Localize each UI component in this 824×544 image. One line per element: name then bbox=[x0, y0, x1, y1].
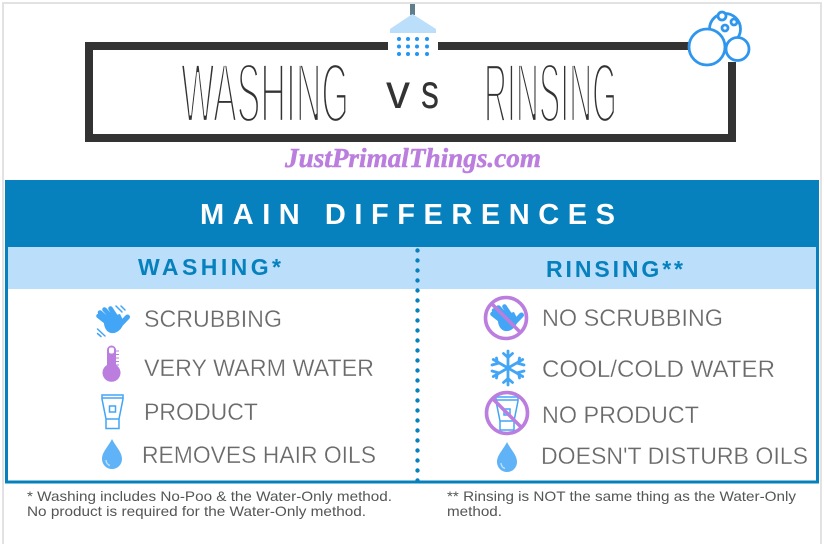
text: product: PRODUCT bbox=[144, 399, 258, 426]
footnote: rinsing: method. bbox=[447, 503, 502, 519]
text: WASHING bbox=[181, 46, 349, 140]
icon: product tube bbox=[102, 395, 123, 428]
footnote: rinsing bbox=[447, 488, 796, 519]
text: removes hair oils: REMOVES HAIR OILS bbox=[142, 442, 376, 469]
footnote: washing bbox=[27, 488, 392, 519]
icon: no product bbox=[486, 392, 528, 434]
icon: soap bubbles bbox=[689, 12, 749, 65]
title: vs: v bbox=[386, 66, 410, 119]
icon: no scrubbing bbox=[486, 298, 526, 338]
title: vs: s bbox=[421, 66, 439, 119]
panel: main differences bbox=[5, 180, 819, 482]
text: RINSING bbox=[484, 46, 617, 140]
icon: water drop right bbox=[497, 442, 517, 472]
text: very warm water: VERY WARM WATER bbox=[144, 355, 374, 382]
title: vs bbox=[386, 66, 439, 119]
column heading: washing: WASHING* bbox=[138, 254, 281, 280]
text: no product: NO PRODUCT bbox=[542, 402, 699, 429]
text: cool/cold water: COOL/COLD WATER bbox=[542, 356, 775, 383]
website name: JustPrimalThings.com bbox=[284, 143, 541, 173]
footnote: washing: * Washing includes No-Poo & the Water-Only method. bbox=[27, 488, 392, 504]
icon: water drop bbox=[102, 439, 122, 469]
text: doesn't disturb oils: DOESN'T DISTURB OILS bbox=[541, 443, 808, 470]
icon: snowflake bbox=[492, 351, 524, 385]
footnote: rinsing: ** Rinsing is NOT the same thing as the Water-Only bbox=[447, 488, 796, 504]
icon: thermometer bbox=[103, 346, 121, 382]
heading: MAIN DIFFERENCES bbox=[200, 199, 615, 231]
icon: scrubbing hand bbox=[98, 306, 128, 336]
column heading: rinsing: RINSING** bbox=[546, 256, 683, 282]
column header band bbox=[8, 247, 816, 289]
icon: shower head bbox=[390, 4, 436, 56]
header band bbox=[5, 180, 819, 247]
footnote: washing: No product is required for the Water-Only method. bbox=[27, 503, 366, 519]
text: scrubbing: SCRUBBING bbox=[144, 306, 282, 333]
text: no scrubbing: NO SCRUBBING bbox=[542, 305, 723, 332]
title frame bbox=[89, 46, 732, 138]
